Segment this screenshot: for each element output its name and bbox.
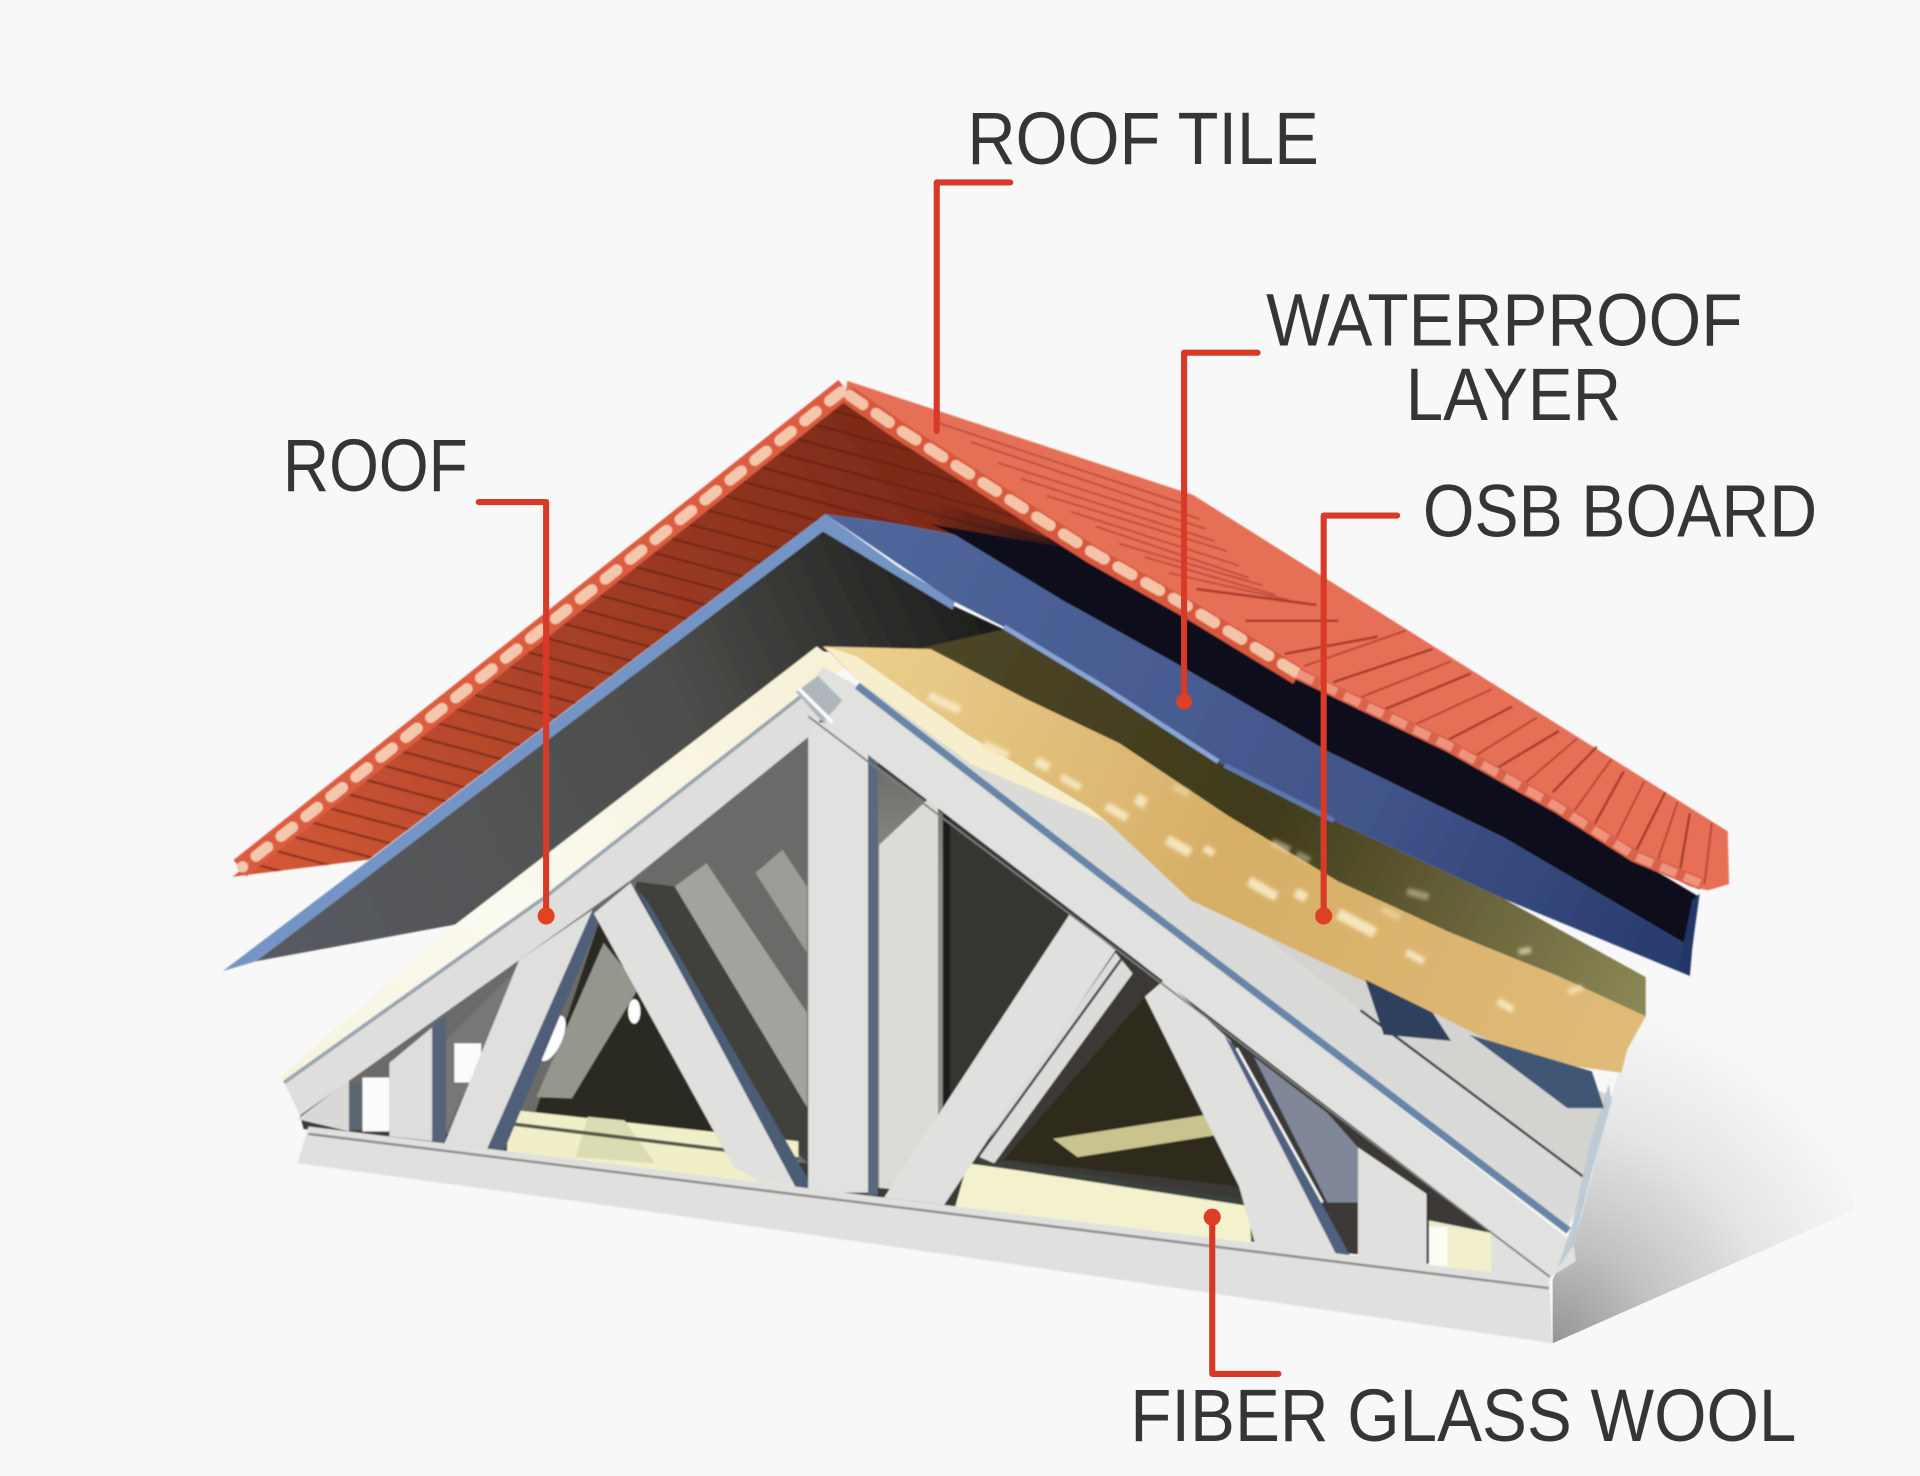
right small vertical (1358, 1147, 1427, 1266)
blue-grey right panel (1254, 1057, 1358, 1202)
member C of right chord (1163, 845, 1613, 1180)
dark blue patches under insulation (1365, 980, 1451, 1041)
member B of right chord (857, 665, 1588, 1227)
label: roof tile: ROOF TILE (967, 97, 1319, 180)
right A-strut (1145, 980, 1336, 1254)
label: fiber glass wool: FIBER GLASS WOOL (1130, 1374, 1796, 1457)
bottom rail (298, 1127, 1553, 1343)
cream insulation strip (279, 647, 845, 1082)
left interior grey area (349, 735, 808, 1163)
cast shadow of the roof (1553, 973, 1855, 1343)
label: waterproof layer (1176, 278, 1742, 710)
front right chord (808, 667, 1576, 1277)
back brace in left bay (536, 943, 639, 1098)
label: roof (283, 424, 555, 924)
oriented sheet: underside and light blue edge (223, 514, 1035, 971)
label: waterproof layer: WATERPROOF (1266, 278, 1742, 361)
king post (808, 722, 868, 1193)
roof tile layer: underside and left eave (233, 388, 1212, 877)
leftmost small triangle (298, 1080, 349, 1131)
fiberglass insulation layer (823, 629, 1646, 1108)
left A-strut right leg (594, 883, 808, 1188)
blue sheet right end (1679, 894, 1700, 976)
membrane light highlights (1004, 627, 1333, 820)
leader: roof tile (937, 182, 1010, 431)
leader: roof (479, 502, 555, 924)
left A-strut left leg (444, 910, 593, 1149)
leader: fiber glass wool (1204, 1209, 1278, 1374)
left dark triangle (527, 918, 732, 1157)
label: roof: ROOF (283, 424, 468, 507)
label: OSB board (1315, 469, 1817, 924)
jagged chord ends (1558, 1084, 1611, 1269)
leader: OSB board (1315, 516, 1397, 924)
grey panel behind king post (877, 765, 943, 1194)
central dark bay (877, 759, 1071, 1194)
roof illustration (223, 381, 1729, 1343)
tile course lines (937, 422, 1712, 884)
left top chord (284, 667, 845, 1116)
leader: waterproof layer (1176, 353, 1258, 710)
waterproof membrane: blue face (825, 514, 1692, 976)
right dark triangle (1004, 997, 1239, 1187)
white gaps left side (362, 1078, 389, 1131)
cream edge of insulation (825, 647, 1108, 823)
navy shadow band (931, 524, 1698, 948)
label: waterproof layer: LAYER (1406, 353, 1621, 436)
insulation speckles (927, 692, 1583, 1013)
label: roof tile (937, 97, 1319, 431)
truss interior background (300, 704, 1550, 1277)
small left vertical post (389, 1027, 432, 1141)
label: OSB board: OSB BOARD (1423, 469, 1817, 552)
steel truss frame (279, 647, 1613, 1343)
right strut thin (980, 953, 1133, 1163)
label: fiber glass wool (1130, 1209, 1796, 1457)
cream floor patches (507, 1109, 798, 1188)
rear diagonal braces (612, 882, 808, 1163)
apex gusset (796, 676, 842, 722)
right strut long (884, 913, 1116, 1205)
roof tile layer: top right face (845, 381, 1729, 890)
